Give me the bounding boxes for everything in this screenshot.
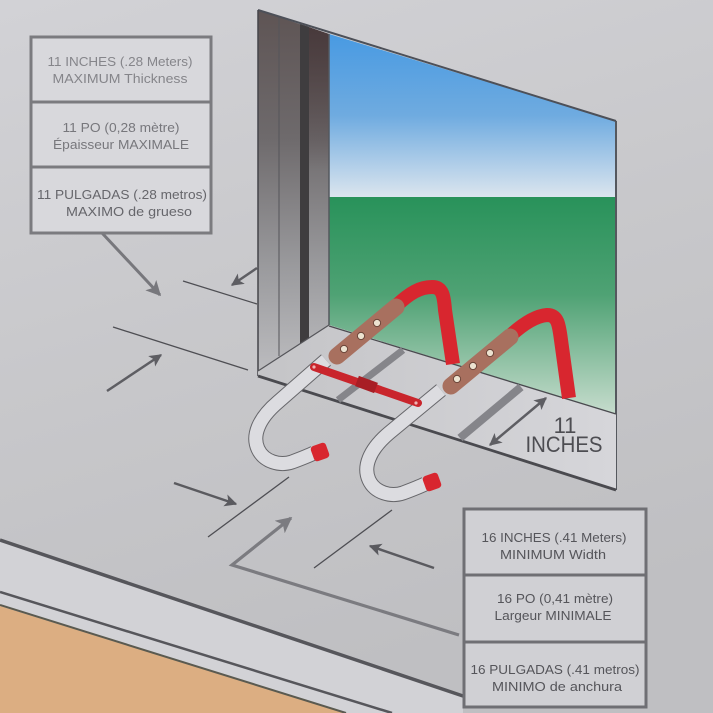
callout: maximum thickness: MAXIMUM Thickness — [52, 72, 188, 86]
width guide lines and arrows — [174, 477, 459, 635]
callout: minimum width: 16 INCHES (.41 Meters) — [482, 531, 626, 545]
callout: maximum thickness: MAXIMO de grueso — [66, 205, 192, 219]
dimension label: 11 inches — [526, 413, 602, 457]
callout: minimum width: 16 PO (0,41 mètre) — [497, 592, 613, 606]
callout: maximum thickness: 11 PULGADAS (.28 metros) — [37, 188, 207, 202]
callout: minimum width: 16 PULGADAS (.41 metros) — [470, 663, 640, 677]
ladder hook: right — [367, 315, 569, 494]
floor and baseboard — [0, 540, 463, 713]
dimension label: 11 inches: INCHES — [526, 432, 602, 457]
callout: maximum thickness: 11 INCHES (.28 Meters) — [48, 55, 192, 69]
callout: maximum thickness — [31, 37, 211, 233]
window frame side — [258, 10, 616, 490]
ladder hook: left — [256, 287, 453, 463]
red spreader bar — [312, 365, 418, 405]
window sill — [258, 325, 616, 490]
callout: maximum thickness: Épaisseur MAXIMALE — [53, 137, 189, 152]
callout: maximum thickness: 11 PO (0,28 mètre) — [62, 121, 180, 135]
callout: minimum width: Largeur MINIMALE — [494, 609, 612, 623]
callout: minimum width: MINIMO de anchura — [492, 680, 622, 694]
thickness guide lines and arrows — [102, 233, 257, 391]
callout: minimum width — [464, 509, 646, 707]
dimension arrow: sill depth — [490, 398, 546, 445]
window opening: sky and grass — [329, 34, 616, 414]
callout: minimum width: MINIMUM Width — [500, 548, 606, 562]
dimension label: 11 inches: 11 — [554, 413, 576, 438]
